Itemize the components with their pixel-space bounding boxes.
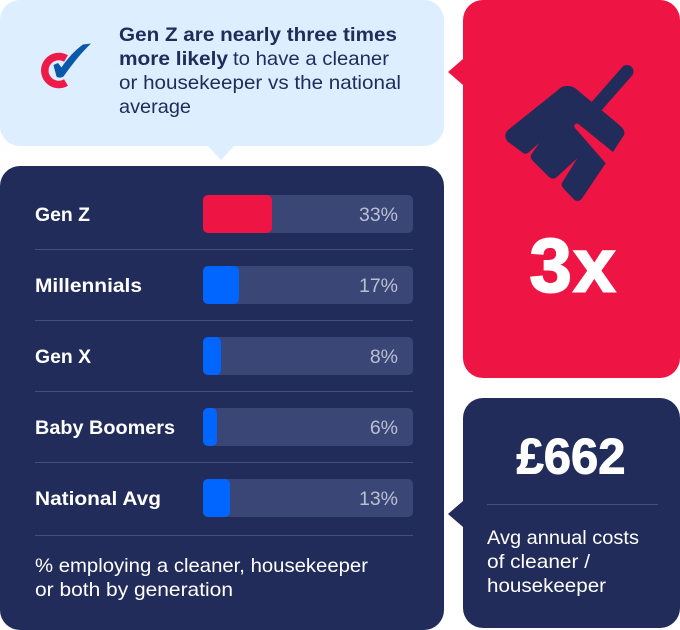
panel: generation bar chart	[0, 166, 444, 630]
icon: check logo	[45, 44, 91, 84]
cost description	[487, 527, 639, 597]
headline text	[119, 24, 401, 118]
headline text: Gen Z are nearly three times	[119, 24, 397, 46]
row: Baby Boomers: 6%	[370, 417, 398, 439]
panel: 3x stat	[448, 0, 680, 378]
icon: broom	[505, 72, 627, 201]
panel: callout headline	[0, 0, 444, 160]
row: Millennials: 17%	[359, 275, 398, 297]
row: Baby Boomers: Baby Boomers	[35, 417, 175, 439]
cost description: of cleaner /	[487, 551, 591, 573]
headline text: to have a cleaner	[233, 48, 390, 70]
row: National Avg: 13%	[359, 488, 398, 510]
chart caption: or both by generation	[35, 579, 233, 601]
headline text: or housekeeper vs the national	[119, 72, 401, 94]
row: Gen Z: 33%	[359, 204, 398, 226]
stat value: 3x	[530, 224, 616, 308]
cost description: housekeeper	[487, 575, 607, 597]
row: Gen X	[35, 337, 413, 375]
row: National Avg: National Avg	[35, 488, 161, 510]
panel: annual cost	[448, 398, 680, 628]
chart caption	[35, 555, 369, 601]
cost description: Avg annual costs	[487, 527, 639, 549]
headline text: more likely	[119, 48, 228, 70]
headline text: average	[119, 96, 191, 118]
row: Gen X: Gen X	[35, 346, 91, 368]
row: Baby Boomers	[35, 408, 413, 446]
row: Gen Z: Gen Z	[35, 204, 90, 226]
row: Millennials	[35, 266, 413, 304]
row: Gen X: 8%	[370, 346, 398, 368]
cost value: £662	[516, 428, 626, 484]
row: Millennials: Millennials	[35, 275, 142, 297]
row: Gen Z	[35, 195, 413, 233]
chart caption: % employing a cleaner, housekeeper	[35, 555, 369, 577]
row: National Avg	[35, 479, 413, 517]
